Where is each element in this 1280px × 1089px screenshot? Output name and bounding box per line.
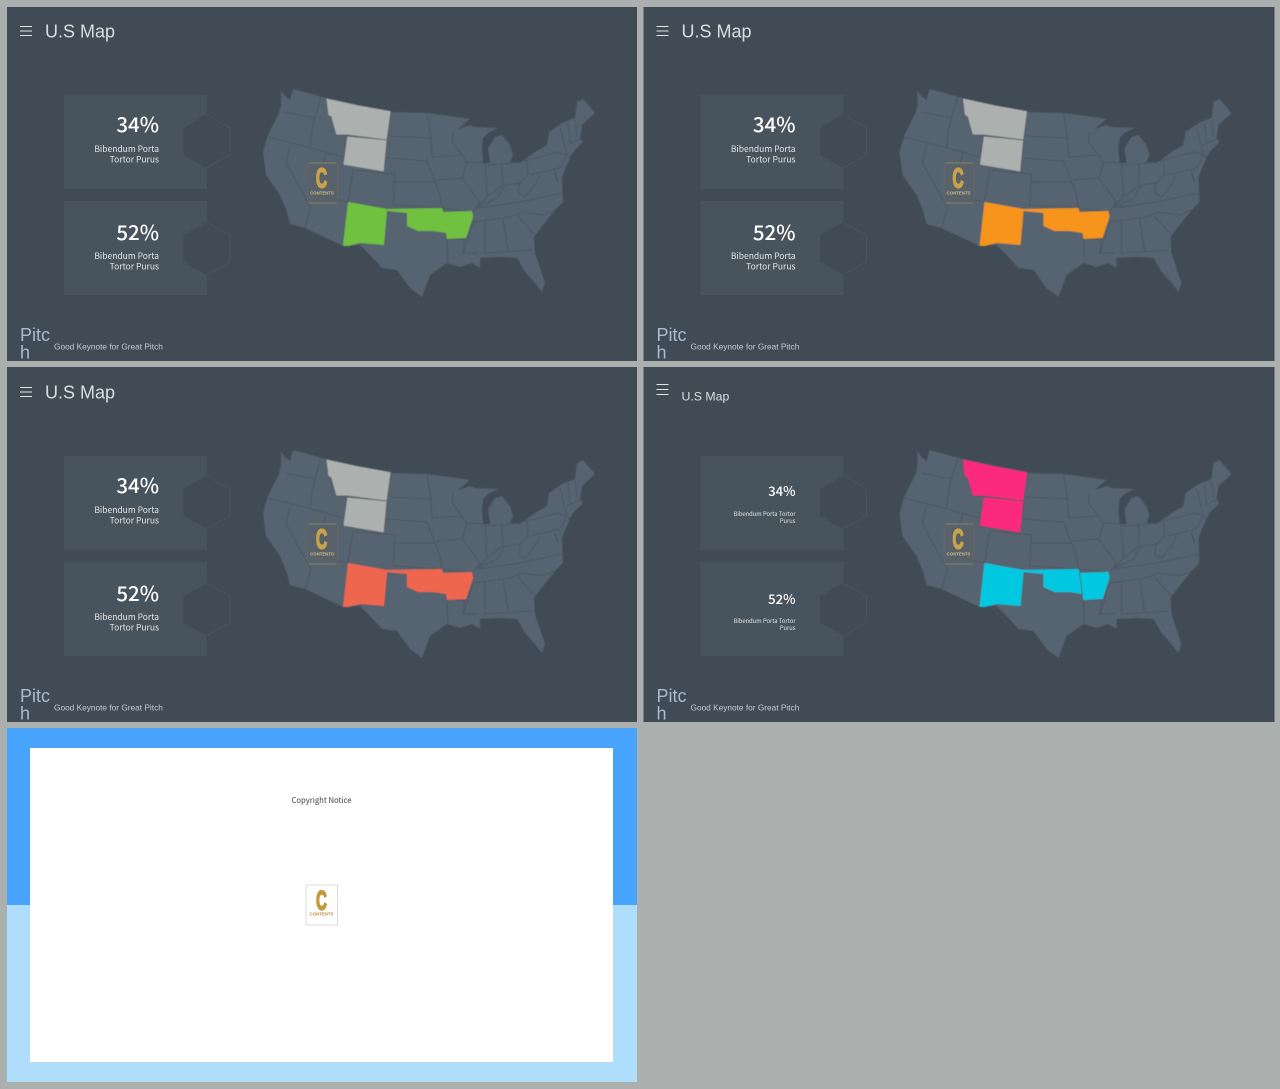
stat card: 34%: 34% bbox=[768, 481, 796, 500]
stat card: 34%: 34% bbox=[116, 108, 159, 138]
stat card: 34%: Bibendum Porta bbox=[94, 504, 159, 516]
copyright heading: Copyright Notice bbox=[291, 795, 352, 806]
footer brand: Pitc bbox=[656, 325, 687, 345]
logo: C bbox=[316, 885, 327, 916]
stat card: 34%: Bibendum Porta bbox=[94, 143, 159, 155]
logo: C bbox=[952, 524, 964, 555]
stat card: 52%: Bibendum Porta bbox=[731, 250, 796, 262]
stat card: 52%: Bibendum Porta bbox=[94, 250, 159, 262]
title: U.S Map bbox=[682, 390, 729, 404]
stat card: 52%: Tortor Purus bbox=[110, 622, 159, 634]
slide 4: pink and cyan map bbox=[644, 367, 1274, 724]
stat card: 34% bbox=[700, 456, 866, 550]
stat card: 34% bbox=[700, 95, 866, 189]
menu icon bbox=[656, 384, 668, 394]
U.S. map with highlighted states bbox=[900, 450, 1232, 658]
logo: CONTENTS bbox=[310, 190, 334, 196]
footer brand: h bbox=[20, 342, 30, 362]
stat card: 52% bbox=[700, 201, 866, 295]
title: U.S Map bbox=[45, 22, 115, 42]
stat card: 52%: Tortor Purus bbox=[746, 260, 796, 272]
stat card: 52%: Bibendum Porta Tortor bbox=[733, 616, 796, 625]
footer brand: Good Keynote for Great Pitch bbox=[54, 342, 163, 352]
logo bbox=[308, 162, 338, 204]
logo: CONTENTS bbox=[310, 552, 334, 556]
stat card: 34%: Bibendum Porta Tortor bbox=[733, 509, 796, 518]
stat card: 52%: 52% bbox=[116, 577, 159, 607]
logo bbox=[306, 885, 338, 925]
stat card: 52%: Purus bbox=[780, 623, 796, 632]
stat card: 34%: 34% bbox=[116, 469, 159, 499]
stat card: 52%: 52% bbox=[753, 216, 796, 246]
stat card: 34%: Tortor Purus bbox=[110, 154, 159, 166]
footer brand bbox=[658, 328, 799, 358]
footer brand: Good Keynote for Great Pitch bbox=[54, 702, 163, 712]
footer brand bbox=[21, 688, 162, 720]
logo: CONTENTS bbox=[310, 912, 333, 916]
stat card: 34%: Tortor Purus bbox=[110, 514, 159, 526]
title: U.S Map bbox=[682, 22, 752, 42]
footer brand bbox=[658, 688, 799, 720]
footer brand: Good Keynote for Great Pitch bbox=[690, 342, 800, 352]
U.S. map with highlighted states bbox=[263, 89, 595, 297]
logo: C bbox=[952, 163, 964, 194]
footer brand bbox=[21, 328, 162, 358]
stat card: 52%: Bibendum Porta bbox=[94, 611, 159, 623]
title: U.S Map bbox=[45, 382, 115, 402]
footer brand: Pitc bbox=[20, 325, 50, 345]
menu icon bbox=[20, 388, 32, 396]
logo bbox=[308, 524, 338, 564]
U.S. map with highlighted states bbox=[900, 89, 1232, 297]
stat card: 34%: 34% bbox=[753, 108, 796, 138]
footer brand: h bbox=[656, 342, 667, 362]
logo: CONTENTS bbox=[947, 190, 970, 196]
footer brand: h bbox=[20, 704, 30, 724]
stat card: 52%: Tortor Purus bbox=[110, 260, 159, 272]
stat card: 52% bbox=[64, 201, 230, 295]
logo: C bbox=[316, 163, 327, 194]
stat card: 34% bbox=[64, 95, 230, 189]
menu icon bbox=[20, 26, 32, 36]
slide 5: copyright notice bbox=[7, 728, 637, 1082]
footer brand: h bbox=[656, 704, 667, 724]
U.S. map with highlighted states bbox=[263, 450, 595, 658]
stat card: 52%: 52% bbox=[768, 589, 796, 608]
footer brand: Pitc bbox=[20, 686, 50, 706]
logo bbox=[944, 162, 974, 204]
stat card: 34% bbox=[64, 456, 230, 550]
footer brand: Good Keynote for Great Pitch bbox=[690, 702, 800, 712]
logo bbox=[944, 524, 974, 564]
stat card: 34%: Purus bbox=[780, 516, 796, 525]
stat card: 52%: 52% bbox=[116, 216, 159, 246]
stat card: 52% bbox=[64, 562, 230, 656]
slide 3: coral map bbox=[7, 367, 637, 724]
footer brand: Pitc bbox=[656, 686, 687, 706]
slide 1: green map bbox=[7, 7, 637, 362]
logo: CONTENTS bbox=[947, 552, 970, 556]
logo: C bbox=[316, 524, 327, 555]
slide 2: orange map bbox=[644, 7, 1274, 362]
stat card: 34%: Tortor Purus bbox=[746, 154, 796, 166]
stat card: 34%: Bibendum Porta bbox=[731, 143, 796, 155]
menu icon bbox=[656, 26, 668, 36]
stat card: 52% bbox=[700, 562, 866, 656]
